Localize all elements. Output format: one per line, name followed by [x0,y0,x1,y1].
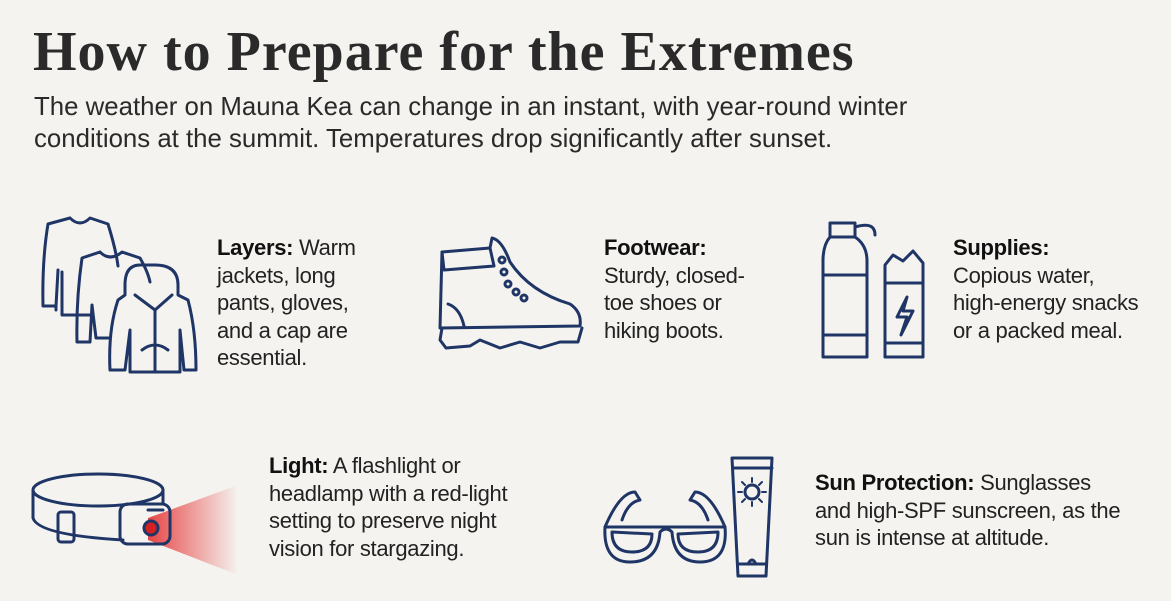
text: footwear: Footwear: [604,235,706,260]
text: light: setting to preserve night [269,508,496,533]
text: supplies: or a packed meal. [953,318,1123,342]
text: light: vision for stargazing. [269,536,464,560]
text: light: headlamp with a red-light [269,480,507,506]
text: sun protection: and high-SPF sunscreen, as the [815,498,1120,522]
text: layers: pants, gloves, [217,290,349,315]
subtitle: conditions at the summit. Temperatures drop significantly after sunset. [34,125,832,153]
icon: boot [438,236,584,350]
subtitle [34,93,907,153]
text: layers [216,235,356,370]
icon: layered clothing [41,216,198,374]
subtitle: The weather on Mauna Kea can change in an instant, with year-round winter [34,93,907,121]
text: footwear: Sturdy, closed- [604,262,745,288]
text: sun protection: Sun Protection: Sunglasses [815,470,1091,495]
text: footwear [604,235,745,342]
icon: headlamp with red beam [32,472,234,573]
text: light: Light: A flashlight or [269,453,460,478]
text: supplies: Supplies: [953,235,1049,260]
text: layers: essential. [217,345,307,370]
text: supplies [953,235,1138,342]
text: sun protection: sun is intense at altitude. [815,525,1049,550]
text: footwear: hiking boots. [604,318,724,342]
text: layers: jackets, long [217,262,335,288]
icon: sunglasses and sunscreen [603,456,774,578]
text: footwear: toe shoes or [604,290,721,315]
text: supplies: high-energy snacks [953,290,1138,315]
text: layers: and a cap are [217,318,348,342]
title: How to Prepare for the Extremes [33,21,855,83]
icon: water bottle and snack bar [822,222,924,358]
text: layers: Layers: Warm [217,235,356,260]
text: light [269,453,508,560]
text: supplies: Copious water, [953,262,1094,288]
text: sun protection [815,470,1120,550]
